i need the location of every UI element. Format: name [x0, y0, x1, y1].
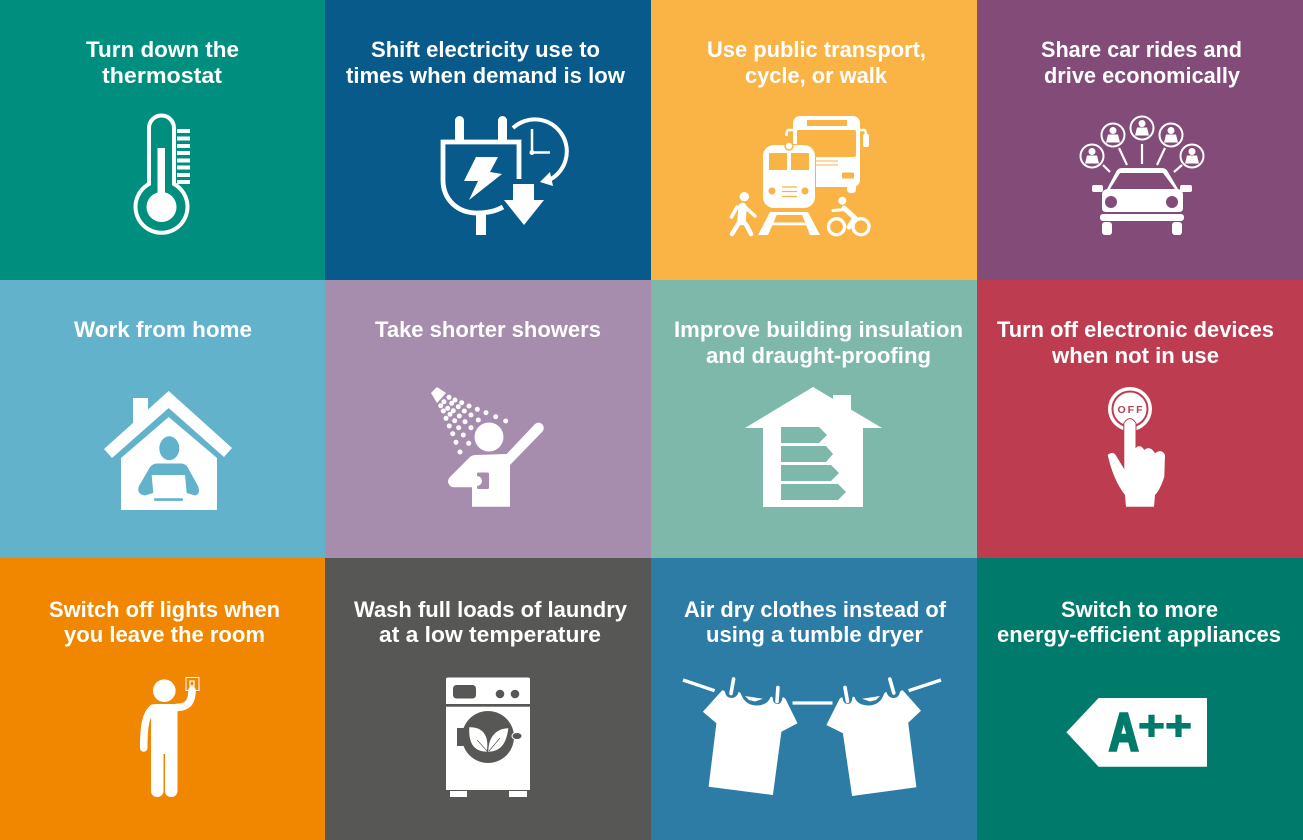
heading: air dry clothes: [684, 597, 947, 647]
panel: work from home: [0, 280, 325, 558]
icon: thermometer: [136, 116, 190, 233]
icon: plug with clock and down arrow: [443, 116, 567, 235]
heading: wash full loads: Wash full loads of laundry: [354, 597, 628, 622]
icon: house with person at laptop: [104, 391, 232, 510]
panel: air dry clothes: [651, 558, 977, 840]
heading: air dry clothes: Air dry clothes instead of: [684, 597, 947, 622]
icon: A++ energy label: ++: [1138, 702, 1192, 749]
heading: switch off lights: [49, 597, 280, 647]
heading: air dry clothes: using a tumble dryer: [706, 622, 923, 647]
heading: energy-efficient appliances: [997, 597, 1281, 647]
heading: switch off lights: Switch off lights when: [49, 597, 280, 622]
heading: public transport: [707, 37, 926, 88]
icon: bus: [786, 116, 869, 193]
heading: energy-efficient appliances: energy-efficient appliances: [997, 622, 1281, 647]
heading: wash full loads: at a low temperature: [379, 622, 601, 647]
heading: shift electricity use: Shift electricity use to: [371, 37, 600, 62]
panel: turn down the thermostat: [0, 0, 325, 280]
icon: washing machine with leaves: [446, 678, 530, 797]
panel: share car rides: [977, 0, 1303, 280]
icon: walker: [732, 192, 755, 234]
heading: turn down the thermostat: [86, 37, 239, 88]
icon: train: [758, 142, 820, 235]
icon: right shirt: [826, 679, 921, 796]
heading: wash full loads: [354, 597, 628, 647]
heading: turn down the thermostat: Turn down the: [86, 37, 239, 62]
heading: shorter showers: Take shorter showers: [375, 317, 601, 342]
heading: public transport: cycle, or walk: [745, 63, 888, 88]
icon: cyclist: [828, 197, 869, 235]
panel: switch off lights: [0, 558, 325, 840]
heading: building insulation: [674, 317, 963, 368]
icon: A++ energy label: [1066, 698, 1207, 767]
heading: switch off lights: you leave the room: [64, 622, 265, 647]
heading: share car rides: Share car rides and: [1041, 37, 1242, 62]
heading: public transport: Use public transport,: [707, 37, 926, 62]
icon: shirts on washing line: [683, 679, 941, 796]
icon: house with energy rating bars: [745, 387, 882, 507]
icon: person at light switch: [144, 678, 199, 797]
heading: shift electricity use: times when demand is low: [346, 63, 626, 88]
heading: turn off electronic devices: when not in use: [1051, 343, 1219, 368]
heading: work from home: Work from home: [74, 317, 252, 342]
heading: energy-efficient appliances: Switch to more: [1061, 597, 1218, 622]
heading: share car rides: [1041, 37, 1242, 88]
panel: public transport: [651, 0, 977, 280]
heading: building insulation: and draught-proofing: [706, 343, 931, 368]
panel: building insulation: [651, 280, 977, 558]
panel: energy-efficient appliances: [977, 558, 1303, 840]
heading: shift electricity use: [346, 37, 626, 88]
icon: A++ energy label: A: [1109, 704, 1138, 762]
icon: person under shower: [431, 387, 544, 507]
icon: finger pressing off button: OFF: [1118, 404, 1143, 416]
heading: share car rides: drive economically: [1044, 63, 1241, 88]
heading: building insulation: Improve building insulation: [674, 317, 963, 342]
icon: finger pressing off button: [1108, 387, 1165, 507]
heading: turn off electronic devices: Turn off electronic devices: [997, 317, 1274, 342]
icon: car with passengers: [1080, 116, 1204, 235]
panel: shift electricity use: [325, 0, 651, 280]
heading: turn down the thermostat: thermostat: [102, 63, 223, 88]
icon: bus, train, walker and cyclist: [732, 116, 869, 235]
panel: shorter showers: [325, 280, 651, 558]
heading: turn off electronic devices: [997, 317, 1274, 368]
panel: wash full loads: [325, 558, 651, 840]
panel: turn off electronic devices: [977, 280, 1303, 558]
icon: left shirt: [703, 679, 798, 795]
icon: passengers: [1080, 116, 1204, 168]
icon: car: [1092, 168, 1192, 235]
